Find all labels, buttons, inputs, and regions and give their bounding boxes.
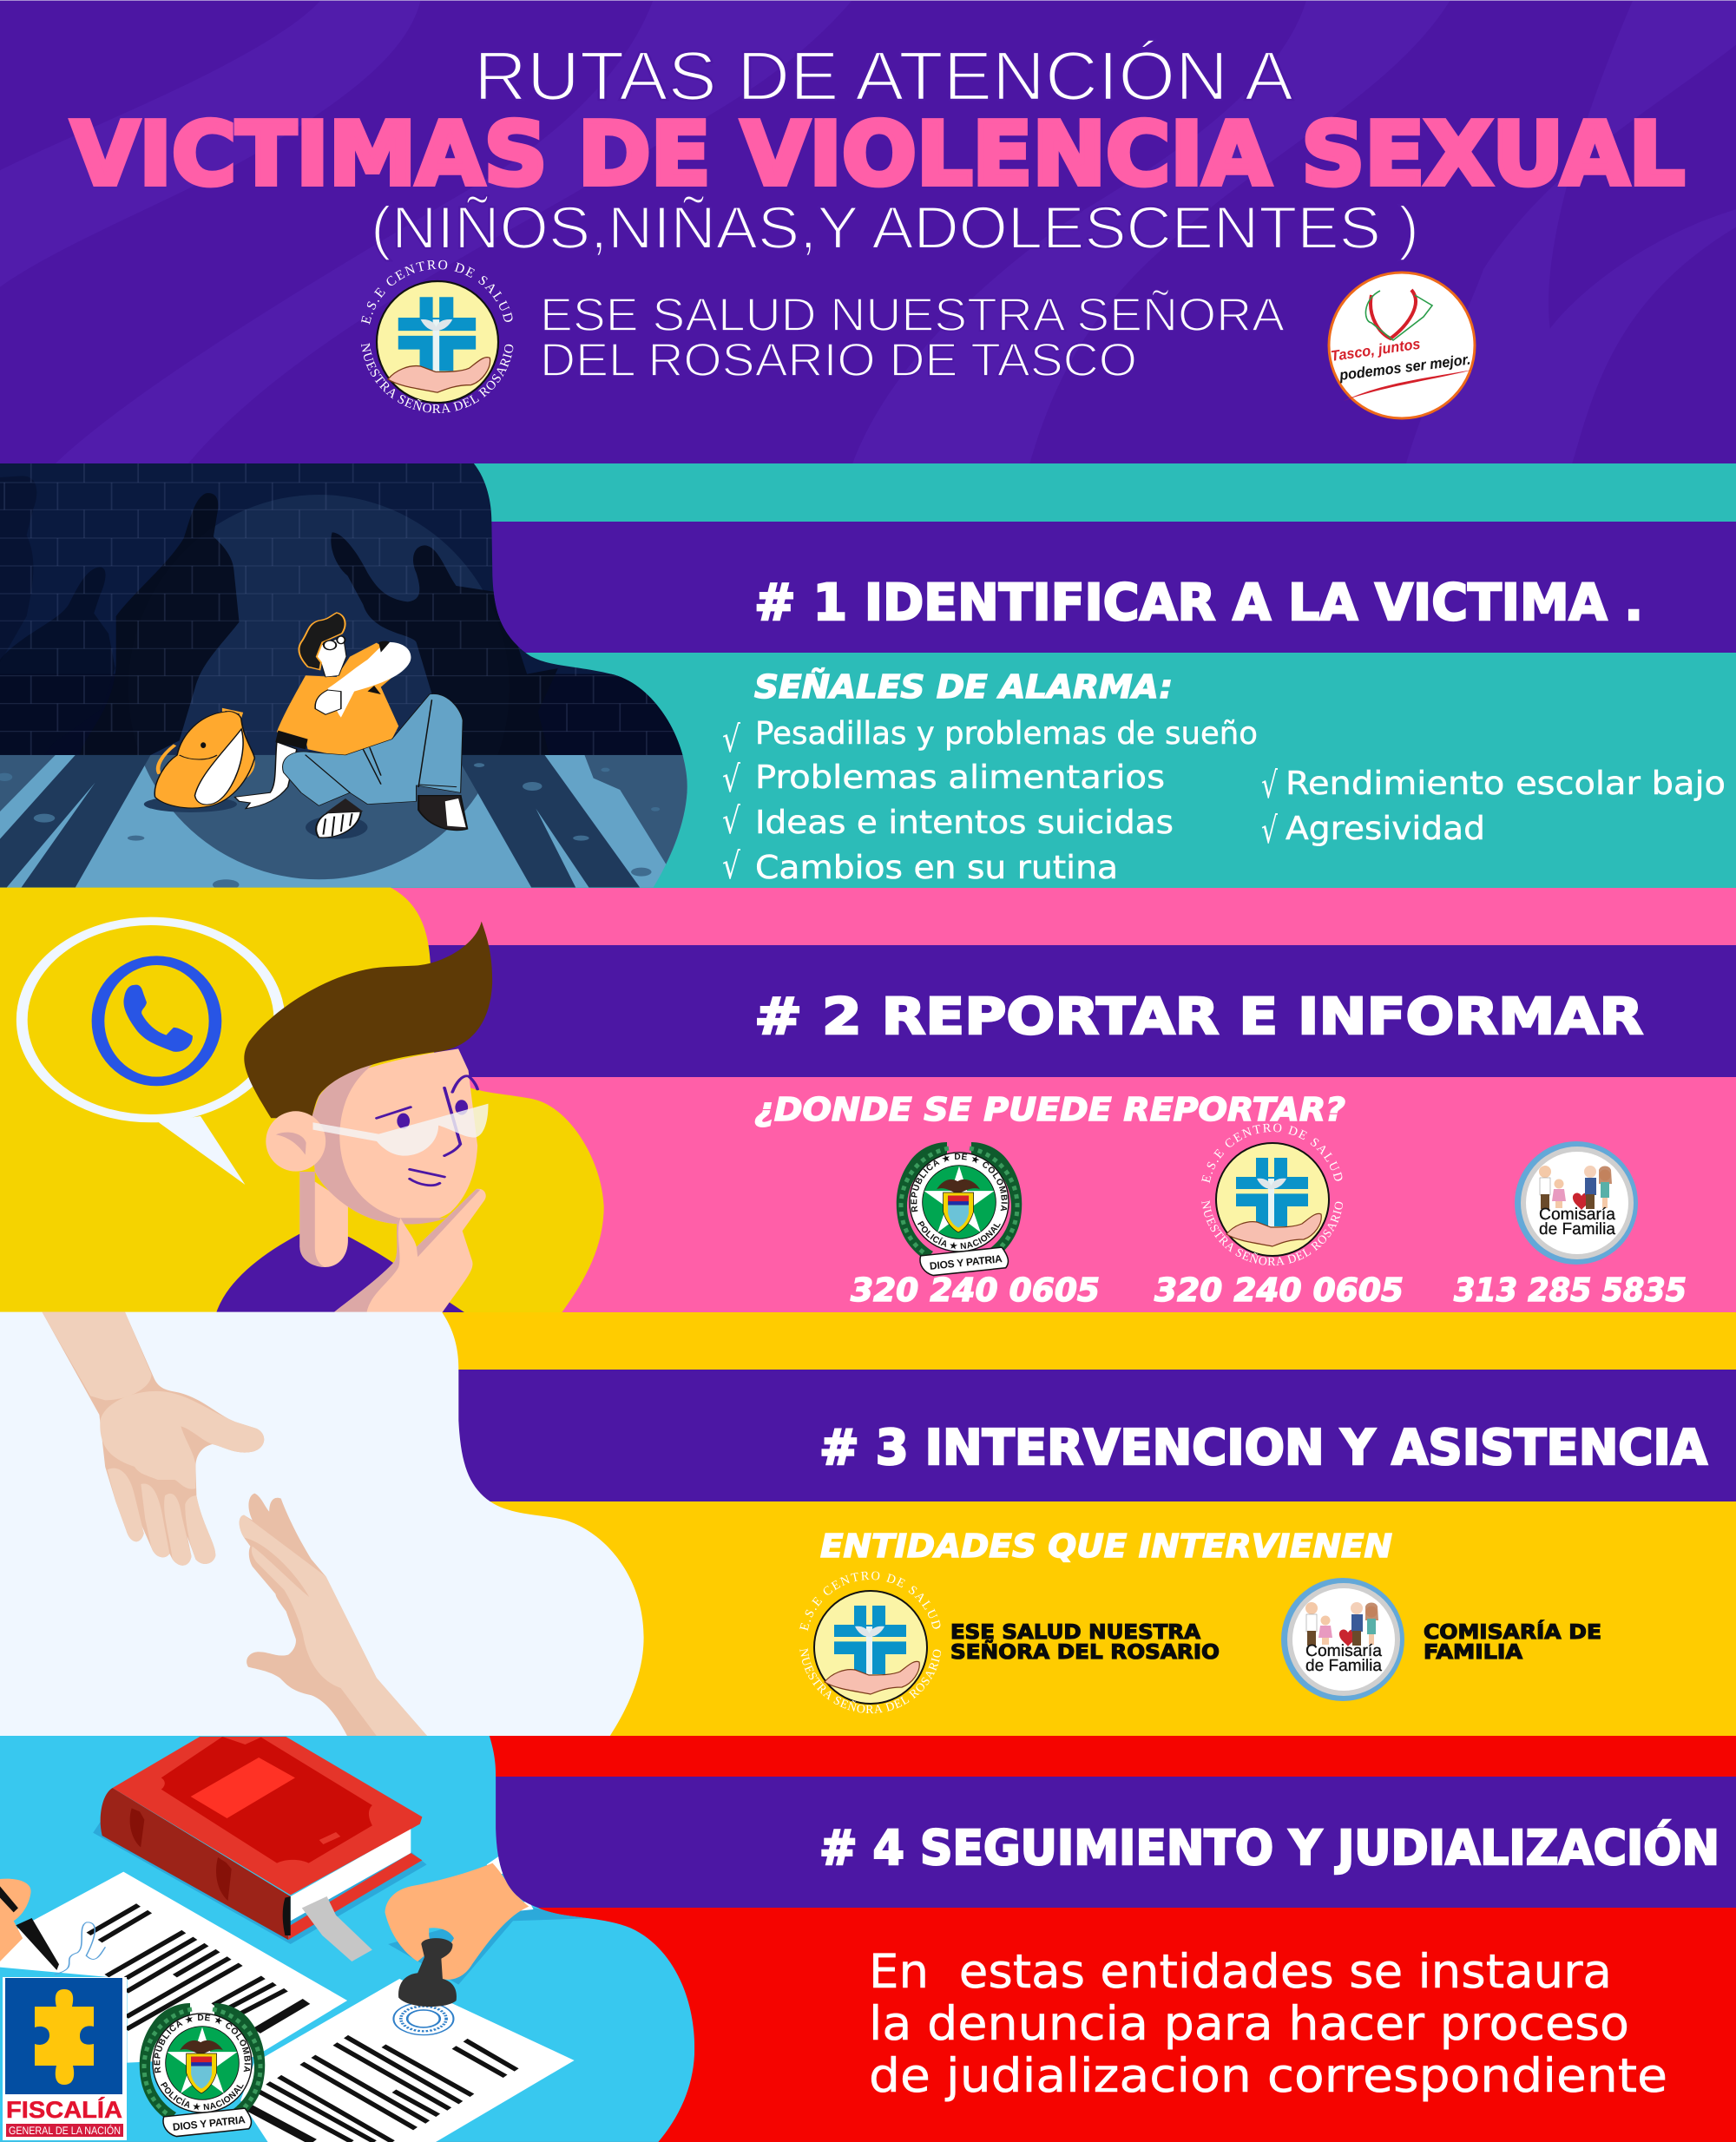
entity name: ESE: ESE SALUD NUESTRA — [950, 1621, 1200, 1644]
entity name: ESE — [950, 1621, 1220, 1664]
alarm signs list, right column: √ — [1261, 764, 1278, 806]
ESE logo — [799, 1571, 941, 1713]
entity name: Comisaría: COMISARÍA DE — [1424, 1620, 1601, 1644]
alarm signs list, right column: Agresividad — [1286, 810, 1485, 847]
ESE logo: E.S.E CENTRO DE SALUD — [361, 260, 512, 325]
Comisaría de Familia logo: de Familia — [1539, 1220, 1615, 1239]
entity name: Comisaría: FAMILIA — [1424, 1641, 1522, 1664]
alarm signs list, left column: Problemas alimentarios — [755, 759, 1165, 796]
alarm signs list, left column: √ — [722, 718, 740, 760]
police logo: POLICÍA ★ NACIONAL — [161, 2081, 244, 2111]
illustration: thinking man with phone bubble — [0, 888, 604, 1312]
phone numbers: 313 285 5835 — [1454, 1271, 1687, 1309]
icon: phone — [98, 961, 215, 1081]
upper hand — [42, 1312, 264, 1566]
illustration: frightened boy and shadows — [0, 460, 708, 890]
hand with stamp — [385, 1855, 534, 2007]
entity name: ESE: SEÑORA DEL ROSARIO — [950, 1639, 1220, 1664]
subheading: alarm signs: SEÑALES DE ALARMA: — [754, 667, 1173, 706]
icon: Fiscalía logo: FISCALÍA — [6, 2097, 122, 2123]
section 3: intervention and assistance — [0, 1312, 1736, 1736]
ESE logo: E.S.E CENTRO DE SALUD — [1201, 1123, 1342, 1184]
purple heading bar 3 — [434, 1370, 1736, 1501]
icon: Fiscalía logo: GENERAL DE LA NACIÓN — [9, 2125, 121, 2137]
alarm signs list, right column — [1261, 764, 1726, 851]
illustration: reaching hands — [0, 1312, 644, 1736]
police logo: POLICÍA ★ NACIONAL — [917, 1220, 1001, 1250]
section 1: identify the victim — [0, 460, 1736, 890]
police logo: DIOS Y PATRIA — [929, 1252, 1003, 1272]
stamp impression — [393, 2002, 453, 2035]
Tasco logo: Tasco, juntos — [1330, 336, 1422, 365]
police logo — [139, 2003, 266, 2137]
closing statement: la denuncia para hacer proceso — [869, 1996, 1629, 2051]
alarm signs list, right column: Rendimiento escolar bajo — [1286, 765, 1726, 802]
icon: book — [101, 1737, 422, 1961]
closing statement — [869, 1944, 1667, 2103]
Tasco logo: podemos ser mejor. — [1338, 352, 1471, 384]
heading: step 1: # 1 IDENTIFICAR A LA VICTIMA . — [754, 573, 1643, 632]
Comisaría de Familia logo — [1515, 1141, 1638, 1265]
title line 1: RUTAS DE ATENCIÓN A — [474, 37, 1294, 115]
police logo: REPÚBLICA ★ DE ★ COLOMBIA — [154, 2014, 251, 2073]
police logo: DIOS Y PATRIA — [172, 2113, 247, 2133]
heading: step 2: # 2 REPORTAR E INFORMAR — [754, 987, 1643, 1046]
organisation name line 1: ESE SALUD NUESTRA SEÑORA — [540, 289, 1285, 341]
alarm signs list, left column: √ — [722, 758, 740, 800]
ESE logo — [361, 260, 514, 413]
title line 3: (NIÑOS,NIÑAS,Y ADOLESCENTES ) — [371, 194, 1419, 261]
police logo — [896, 1142, 1023, 1276]
phone numbers: 320 240 0605 — [851, 1271, 1100, 1309]
section 4: follow-up and prosecution — [0, 1736, 1736, 2142]
purple heading bar 1 — [434, 522, 1736, 653]
ESE logo: E.S.E CENTRO DE SALUD — [799, 1571, 941, 1632]
organisation name line 2: DEL ROSARIO DE TASCO — [540, 334, 1137, 386]
phone numbers — [851, 1271, 1687, 1309]
ESE logo: NUESTRA SEÑORA DEL ROSARIO — [1201, 1199, 1343, 1265]
alarm signs list, left column: Ideas e intentos suicidas — [755, 804, 1174, 841]
alarm signs list, left column — [722, 716, 1258, 887]
alarm signs list, left column: √ — [722, 844, 740, 887]
speech bubble — [22, 921, 279, 1185]
closing statement: En estas entidades se instaura — [869, 1944, 1612, 1999]
ESE logo: NUESTRA SEÑORA DEL ROSARIO — [361, 343, 514, 413]
section 2: report and inform — [0, 887, 1736, 1312]
illustration: book, documents and stamp — [0, 1736, 727, 2142]
icon: Fiscalía logo — [3, 1977, 127, 2140]
Comisaría de Familia logo: Comisaría — [1305, 1642, 1382, 1660]
Comisaría de Familia logo: de Familia — [1305, 1657, 1382, 1675]
boy figure — [234, 613, 467, 838]
purple heading bar 4 — [434, 1777, 1736, 1908]
closing statement: de judializacion correspondiente — [869, 2048, 1667, 2103]
alarm signs list, left column: Pesadillas y problemas de sueño — [755, 716, 1258, 752]
alarm signs list, right column: √ — [1261, 809, 1278, 851]
lower hand — [240, 1494, 427, 1736]
police logo: REPÚBLICA ★ DE ★ COLOMBIA — [911, 1153, 1008, 1212]
signature and pen — [0, 1879, 105, 1974]
Comisaría de Familia logo: Comisaría — [1539, 1206, 1615, 1224]
subheading: intervening entities: ENTIDADES QUE INTERVIENEN — [820, 1528, 1392, 1565]
Tasco logo — [1329, 273, 1475, 418]
phone numbers: 320 240 0605 — [1154, 1271, 1404, 1309]
alarm signs list, left column: Cambios en su rutina — [755, 849, 1118, 886]
Comisaría de Familia logo — [1281, 1578, 1404, 1701]
heading: step 3: # 3 INTERVENCION Y ASISTENCIA — [819, 1420, 1708, 1476]
header panel — [0, 0, 1736, 420]
main title: VICTIMAS DE VIOLENCIA SEXUAL — [71, 103, 1685, 205]
backpack — [155, 709, 254, 808]
man figure — [216, 922, 492, 1312]
entity name: Comisaría — [1424, 1620, 1601, 1664]
subheading: where to report: ¿DONDE SE PUEDE REPORTAR? — [754, 1091, 1345, 1128]
papers — [0, 1872, 575, 2142]
ESE logo: NUESTRA SEÑORA DEL ROSARIO — [799, 1647, 941, 1713]
alarm signs list, left column: √ — [722, 799, 740, 842]
ESE logo — [1201, 1123, 1343, 1265]
purple heading bar 2 — [391, 945, 1736, 1077]
